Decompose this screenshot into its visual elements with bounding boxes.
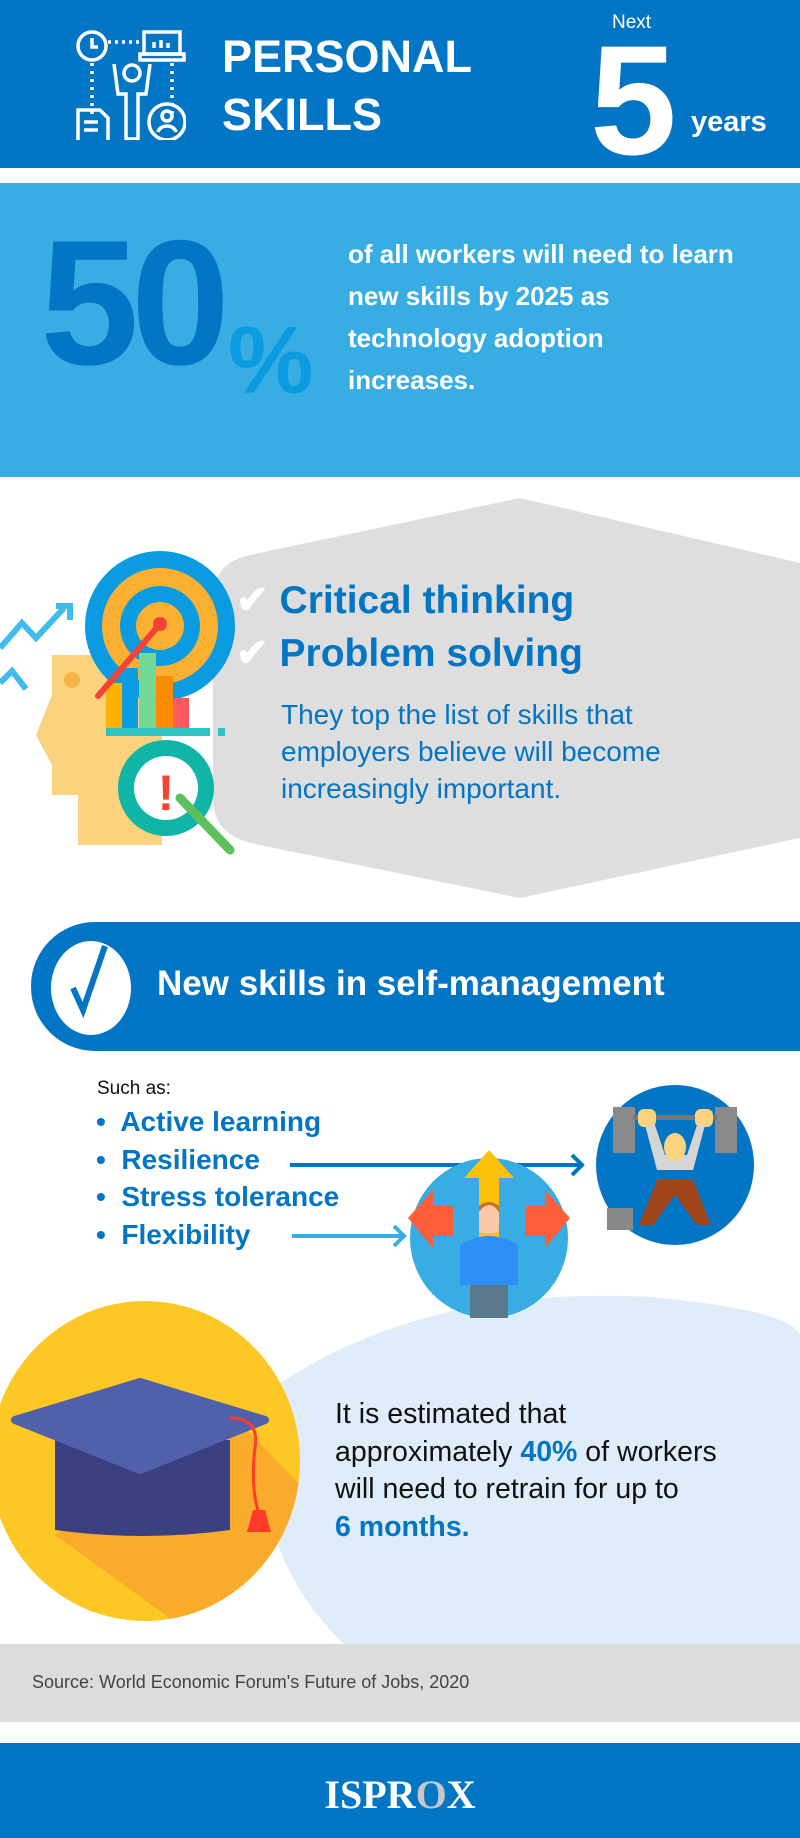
list of skills: • Resilience: [96, 1144, 260, 1174]
checklist heading: ✔ Problem solving: [236, 632, 583, 675]
description text: employers believe will become: [281, 736, 661, 767]
gray hexagon: [213, 498, 800, 898]
stat panel 50%: %: [228, 307, 313, 414]
list of skills: [96, 1078, 339, 1250]
stat panel 50%: [0, 183, 800, 477]
stat text: increases.: [348, 365, 475, 395]
banner: self-management: [31, 922, 800, 1051]
list of skills: • Flexibility: [96, 1218, 251, 1250]
footer with logo: ISPROX: [324, 1772, 476, 1817]
footer with logo: [0, 1743, 800, 1838]
panel: critical thinking: [0, 498, 800, 898]
retrain text: approximately 40% of workers: [335, 1436, 717, 1468]
icon: person skills: [76, 30, 186, 140]
description text: [281, 699, 661, 804]
next 5 years: years: [691, 106, 767, 138]
source bar: Source: World Economic Forum's Future of Jobs, 2020: [32, 1672, 469, 1692]
icon: check badge: [51, 941, 131, 1035]
icon: head with target: [0, 551, 235, 854]
icon: weightlifter: [596, 1085, 754, 1245]
checklist heading: ✔ Critical thinking: [236, 579, 574, 622]
stat text: [348, 239, 734, 395]
description text: increasingly important.: [281, 773, 561, 804]
stat text: of all workers will need to learn: [348, 239, 734, 269]
big number: 50: [40, 203, 222, 402]
icon: head with target: !: [158, 765, 174, 821]
next 5 years: Next: [612, 12, 651, 33]
arrows: [290, 1154, 585, 1248]
icon: person at crossroads: [408, 1150, 570, 1318]
list of skills: Such as:: [97, 1078, 171, 1099]
icon: graduation cap: [0, 1301, 300, 1621]
retrain text: 6 months.: [335, 1510, 470, 1542]
stat text: new skills by 2025 as: [348, 281, 610, 311]
banner text: New skills in self-management: [157, 964, 665, 1003]
title: PERSONAL: [222, 31, 472, 82]
title: SKILLS: [222, 89, 382, 140]
source bar: [0, 1644, 800, 1722]
stat text: technology adoption: [348, 323, 604, 353]
description text: They top the list of skills that: [281, 699, 633, 730]
header band: [0, 0, 800, 168]
retrain text: It is estimated that: [335, 1398, 566, 1430]
checklist heading: [236, 579, 583, 675]
next 5 years: [590, 12, 767, 188]
next 5 years: 5: [590, 14, 677, 188]
list of skills: • Active learning: [96, 1106, 321, 1137]
title: [222, 31, 472, 140]
retrain text: [335, 1398, 717, 1542]
list of skills: • Stress tolerance: [96, 1181, 339, 1212]
retrain text: will need to retrain for up to: [335, 1473, 679, 1505]
light blue blob: [278, 1296, 800, 1644]
